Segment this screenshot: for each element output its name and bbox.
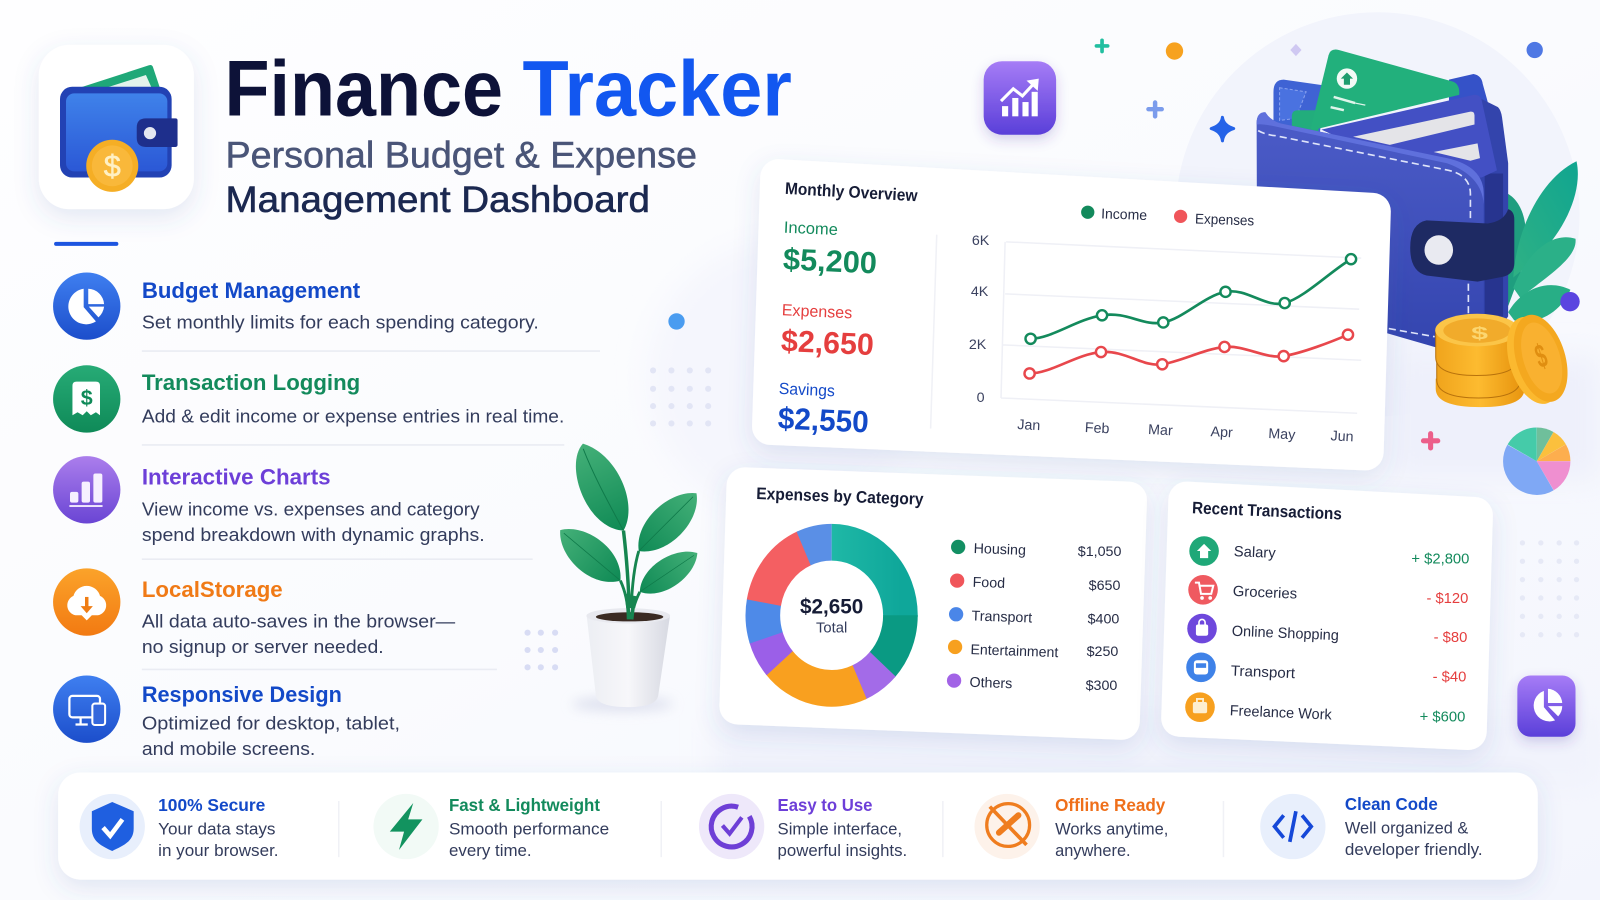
illustration: potted plant [549,435,709,711]
icon: app wallet tile: $ [104,150,121,184]
stat: savings: $2,550 [777,402,869,440]
benefit: fast [373,794,609,860]
line chart: income vs expenses: May [1268,426,1297,444]
benefit: fast: Fast & Lightweight [449,795,600,815]
benefit: offline [974,794,1168,860]
line chart: income vs expenses: 4K [971,284,989,300]
row: freelance work [1185,692,1465,725]
row: transport: - $40 [1433,670,1466,686]
category legend: $400 [1088,611,1119,627]
subtitle line 2: Management Dashboard [226,179,650,220]
row: groceries: - $120 [1426,591,1468,607]
feature: transaction logging: $ [81,386,93,410]
line chart: income vs expenses: Feb [1084,420,1110,437]
stat: income: Income [783,219,838,239]
accent bar [54,242,118,246]
donut centre total [800,594,863,637]
line chart: income vs expenses: Jan [1017,417,1041,434]
benefit: clean code [1260,794,1483,859]
panel: benefits strip [58,772,1538,880]
category legend: $250 [1087,644,1118,660]
row: groceries: Groceries [1232,584,1297,603]
benefit: easy: Easy to Use [778,795,873,815]
feature: interactive charts [53,456,533,559]
line chart: income vs expenses: 0 [977,390,985,406]
row: freelance work: + $600 [1420,709,1465,725]
icon: purple pie tile [1517,676,1576,737]
feature: responsive design: and mobile screens. [142,738,315,759]
title: Finance [224,44,503,132]
benefit: easy: powerful insights. [778,841,907,860]
benefit: secure: Your data stays [158,820,276,839]
panel: recent transactions [1180,498,1474,732]
coin stack: $ [1471,323,1488,343]
coin stack [1435,314,1524,407]
row: online shopping: - $80 [1434,630,1467,646]
benefit: offline: Offline Ready [1055,795,1166,815]
feature: responsive design [53,676,400,759]
wallet strap [1410,209,1514,282]
benefit: clean code: developer friendly. [1345,840,1483,859]
standing coin: $ [1531,337,1551,375]
heading: monthly overview: Monthly Overview [784,179,919,205]
feature: responsive design: Optimized for desktop, tablet, [142,713,400,734]
feature: interactive charts: spend breakdown with dynamic graphs. [142,524,485,545]
wallet blue card [1321,95,1497,179]
line chart: income vs expenses: 6K [972,233,990,249]
benefit: clean code: Clean Code [1345,794,1438,814]
feature list [53,272,600,759]
wallet front [1257,112,1484,357]
benefit: fast: Smooth performance [449,820,609,839]
stat: savings: Savings [778,380,835,400]
feature: local storage [53,568,497,669]
stat: income: $5,200 [782,242,878,280]
benefit: offline: Works anytime, [1055,820,1168,839]
icon: purple growth chart tile [984,61,1056,135]
line chart: income vs expenses: Jun [1330,428,1354,445]
illustration: large wallet with cards, plant and coins [1257,50,1580,410]
benefit: secure: in your browser. [158,841,279,860]
row: transport: Transport [1230,664,1295,682]
line chart: income vs expenses [969,233,1361,445]
stat: expenses [780,301,875,362]
feature: budget management: Set monthly limits for each spending category. [142,312,539,333]
title accent: Tracker [522,44,792,132]
benefit: secure [80,794,279,860]
stat: savings [777,380,869,440]
feature: local storage: All data auto-saves in the browser— [142,611,455,632]
feature: transaction logging [53,365,564,445]
category legend: Transport [971,608,1032,627]
panel: monthly overview [770,178,1372,452]
feature: budget management: Budget Management [142,278,361,303]
stat: expenses: Expenses [781,301,853,322]
category legend: $1,050 [1078,544,1121,560]
category legend: Entertainment [970,642,1059,661]
feature: budget management [53,272,600,351]
row: freelance work: Freelance Work [1229,703,1333,724]
line chart: income vs expenses: Apr [1210,424,1233,441]
donut chart [734,512,929,718]
panel: expenses by category [734,484,1129,721]
heading: recent transactions: Recent Transactions [1192,498,1342,524]
feature: local storage: LocalStorage [142,577,283,602]
row: online shopping: Online Shopping [1231,624,1339,644]
benefit: easy: Simple interface, [778,820,902,839]
row: online shopping [1187,614,1467,646]
category legend: $650 [1089,578,1120,594]
donut centre total: Total [816,621,847,637]
icon: small pie chart [1514,438,1560,484]
row: salary: + $2,800 [1411,551,1469,567]
feature: transaction logging: Transaction Logging [142,370,360,395]
row: salary: Salary [1234,544,1277,562]
row: salary [1189,536,1469,567]
chart legend: Income [1101,206,1147,224]
icon: app wallet tile [39,45,194,209]
wallet back pockets [1273,80,1327,143]
stat: expenses: $2,650 [780,324,875,362]
stat: income [782,219,878,280]
benefit: fast: every time. [449,841,532,860]
feature: responsive design: Responsive Design [142,682,342,707]
decorative sparkles and dots [524,40,1579,670]
category legend: Food [972,575,1005,592]
benefit: secure: 100% Secure [158,795,266,815]
wallet green card [1310,50,1459,131]
category legend [947,540,1121,694]
line chart: income vs expenses: Mar [1148,422,1173,439]
benefit: easy [699,794,907,860]
standing coin [1497,308,1577,410]
row: transport [1186,653,1466,686]
feature: interactive charts: Interactive Charts [142,465,331,490]
category legend: Housing [973,541,1026,559]
chart legend [1081,206,1254,230]
heading: expenses by category: Expenses by Category [756,484,924,509]
donut centre total: $2,650 [800,594,863,618]
chart legend: Expenses [1195,211,1254,230]
line chart: income vs expenses: 2K [969,337,987,353]
benefit: clean code: Well organized & [1345,819,1468,838]
category legend: Others [969,675,1013,692]
subtitle line 1: Personal Budget & Expense [226,134,697,175]
row: groceries [1188,575,1468,607]
feature: local storage: no signup or server needed. [142,636,384,657]
feature: transaction logging: Add & edit income or expense entries in real time. [142,405,564,426]
category legend: $300 [1086,678,1117,694]
benefit: offline: anywhere. [1055,841,1131,860]
feature: interactive charts: View income vs. expenses and category [142,498,480,519]
